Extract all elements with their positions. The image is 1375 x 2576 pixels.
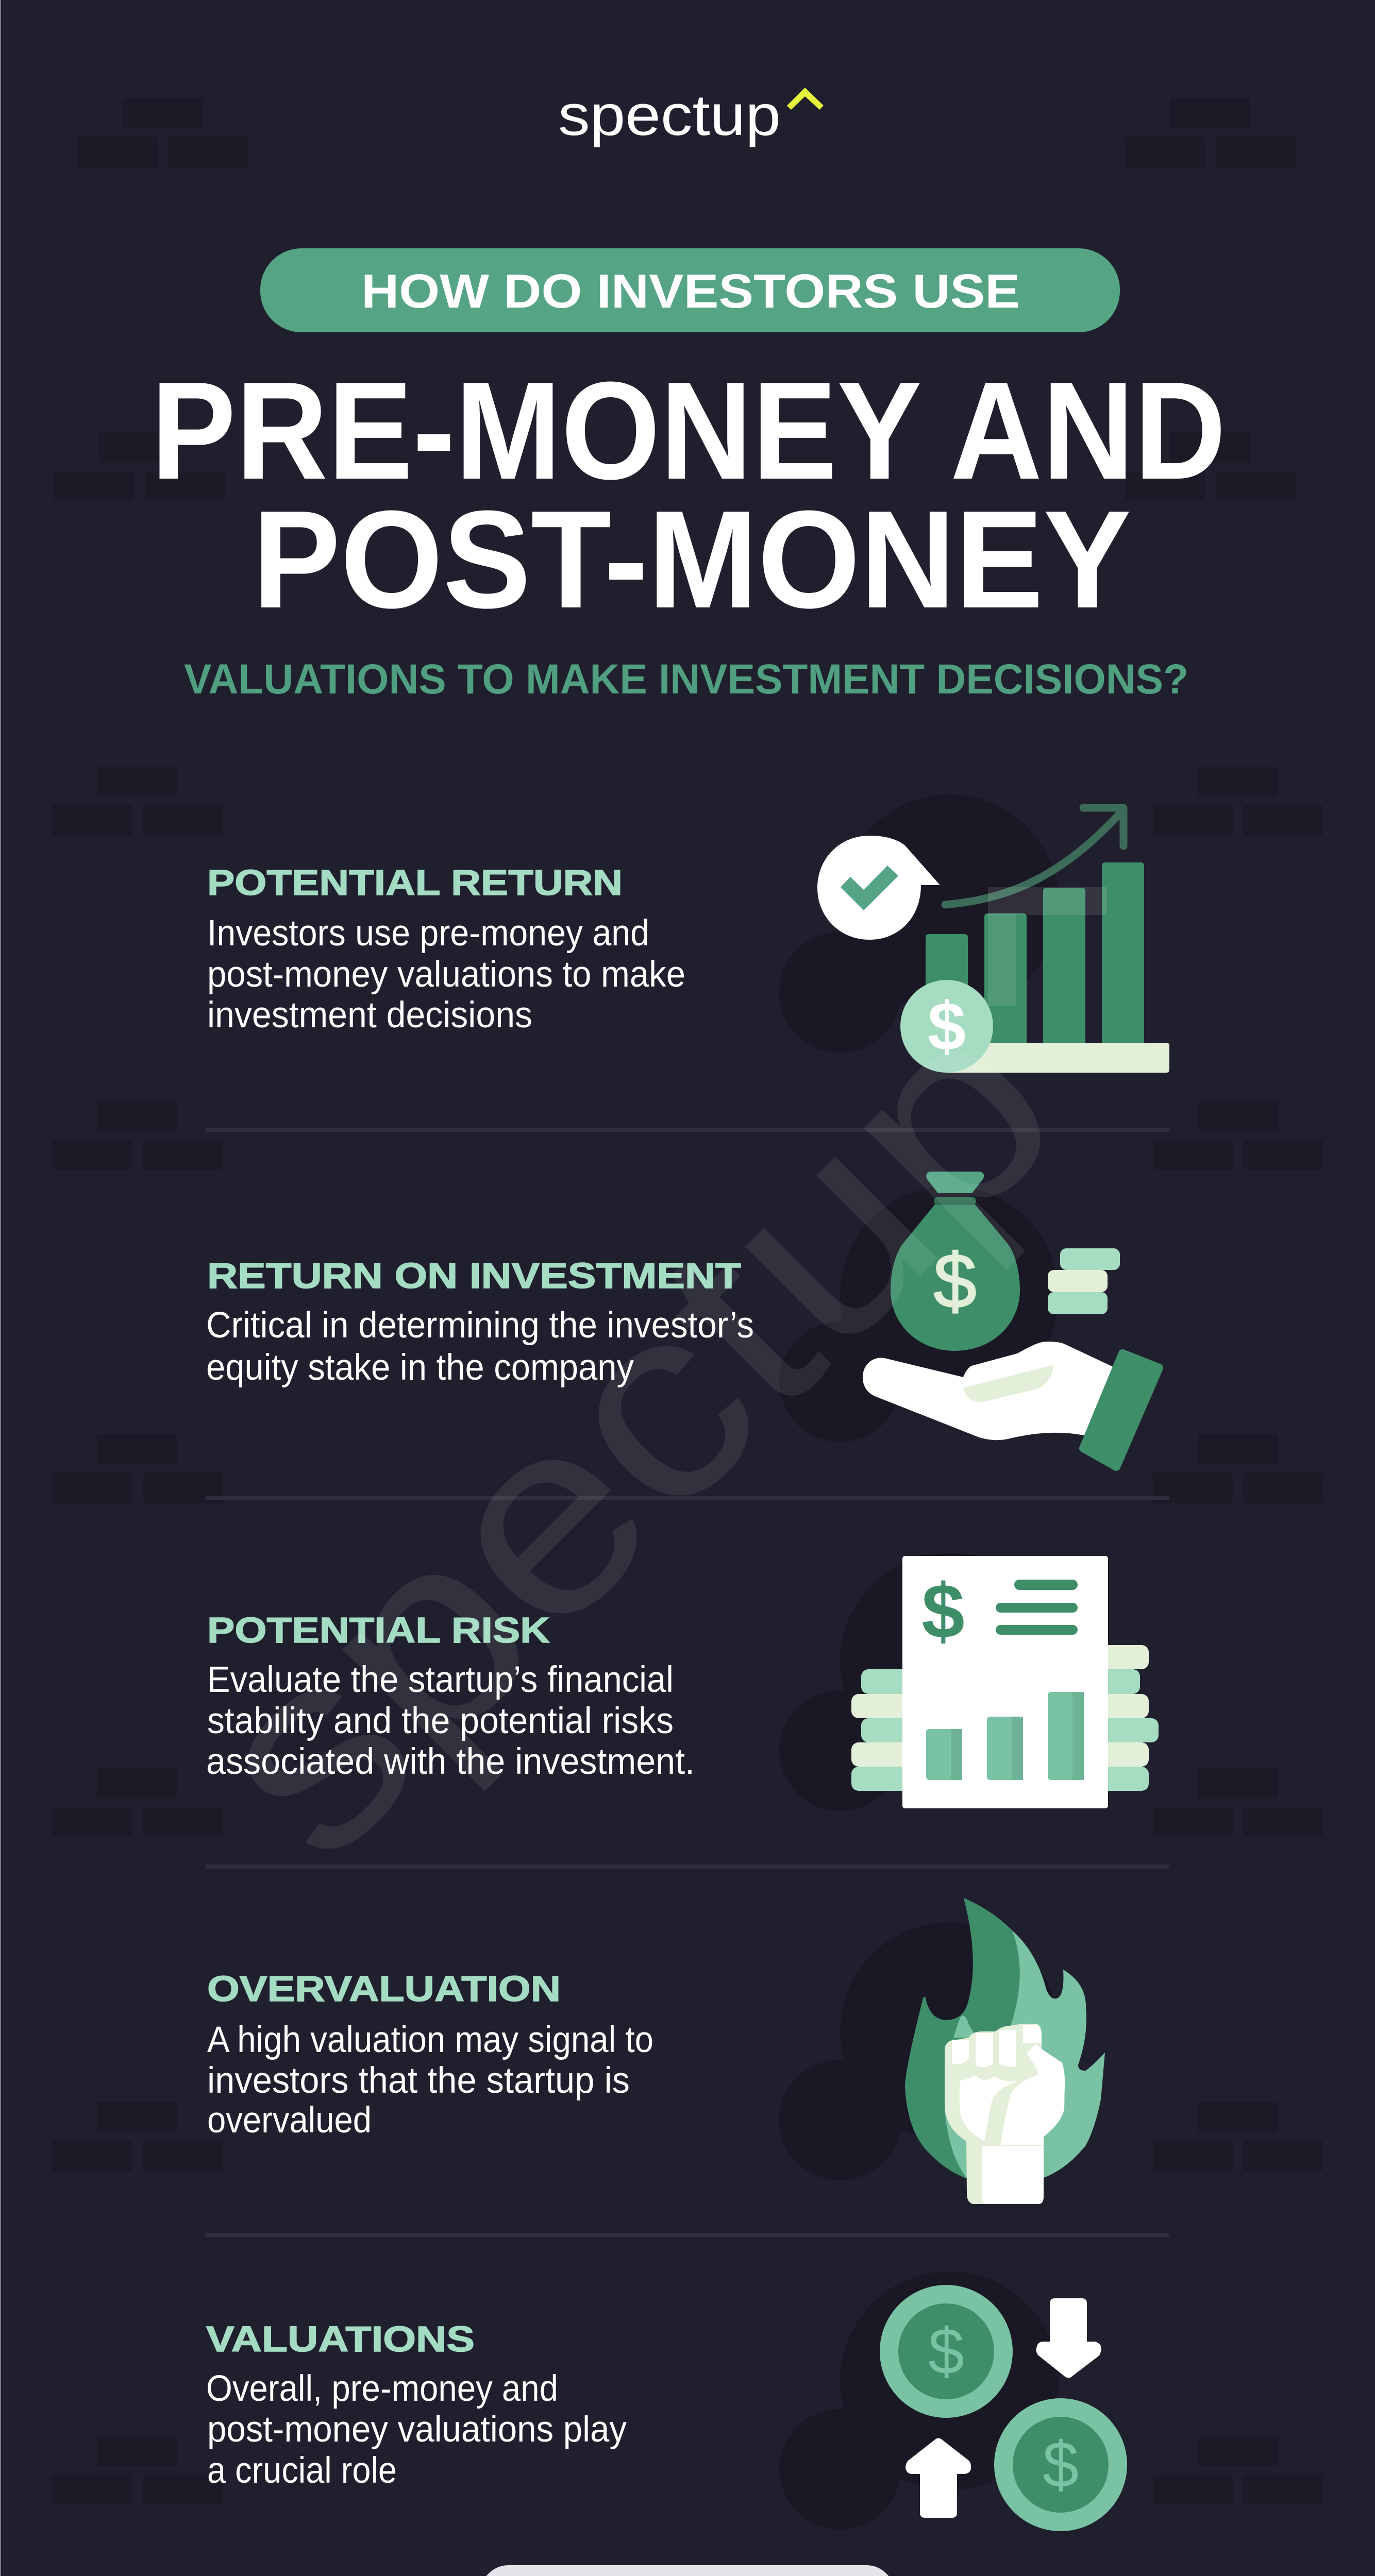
title: POST-MONEY	[253, 482, 1131, 637]
heading pill: how do investors use: HOW DO INVESTORS USE	[361, 264, 1020, 318]
panel: return on investment text: RETURN ON INVESTMENT	[207, 1256, 741, 1296]
title: PRE-MONEY AND	[151, 353, 1226, 509]
watermark: spectup: spectup	[149, 951, 1113, 1914]
icon: money bag over hand with coins	[779, 1172, 1159, 1467]
icon: financial report with cash stacks: $	[921, 1568, 965, 1654]
panel: valuations text: post-money valuations play	[207, 2409, 627, 2450]
title	[151, 353, 1226, 637]
panel: potential risk text: POTENTIAL RISK	[207, 1610, 550, 1650]
panel: valuations text: VALUATIONS	[206, 2319, 475, 2359]
panel: potential risk text: Evaluate the startup’s financial	[207, 1659, 674, 1700]
icon: financial report with cash stacks	[779, 1553, 1159, 1811]
panel: overvaluation text	[207, 1969, 653, 2141]
panel: potential return text: POTENTIAL RETURN	[207, 862, 623, 903]
icon: growth chart with coin and check bubble: $	[928, 989, 966, 1065]
footer pill: made with love by spectup.com	[480, 2565, 895, 2576]
panel: potential return text	[207, 862, 685, 1036]
panel: potential return text: post-money valuations to make	[207, 954, 685, 995]
panel: overvaluation text: overvalued	[207, 2100, 372, 2141]
panel: return on investment text	[206, 1256, 754, 1388]
icon: coins with up and down arrows	[779, 2272, 1127, 2531]
icon: coins with up and down arrows: $	[928, 2315, 964, 2387]
icon: money bag over hand with coins: $	[933, 1238, 977, 1324]
panel: valuations text: a crucial role	[207, 2450, 397, 2491]
icon: coins with up and down arrows: $	[1043, 2428, 1079, 2501]
icon: growth chart with coin and check bubble	[779, 794, 1169, 1073]
panel: potential return text: Investors use pre-money and	[207, 913, 649, 954]
panel: return on investment text: Critical in determining the investor’s	[206, 1305, 754, 1346]
panel: overvaluation text: A high valuation may signal to	[207, 2020, 653, 2060]
panel: overvaluation text: OVERVALUATION	[207, 1969, 561, 2009]
panel: overvaluation text: investors that the startup is	[207, 2060, 630, 2101]
subtitle: VALUATIONS TO MAKE INVESTMENT DECISIONS?	[184, 656, 1188, 703]
heading pill: how do investors use	[260, 248, 1120, 332]
panel: valuations text: Overall, pre-money and	[206, 2368, 558, 2409]
panel: potential return text: investment decisions	[207, 995, 532, 1036]
icon: fist in flame	[779, 1898, 1105, 2204]
panel: return on investment text: equity stake in the company	[206, 1347, 634, 1388]
panel: potential risk text: associated with the investment.	[206, 1741, 695, 1782]
panel: potential risk text: stability and the potential risks	[207, 1701, 674, 1741]
logo: spectup: spectup	[558, 83, 781, 147]
panel: potential risk text	[206, 1610, 695, 1782]
panel: valuations text	[206, 2319, 627, 2491]
